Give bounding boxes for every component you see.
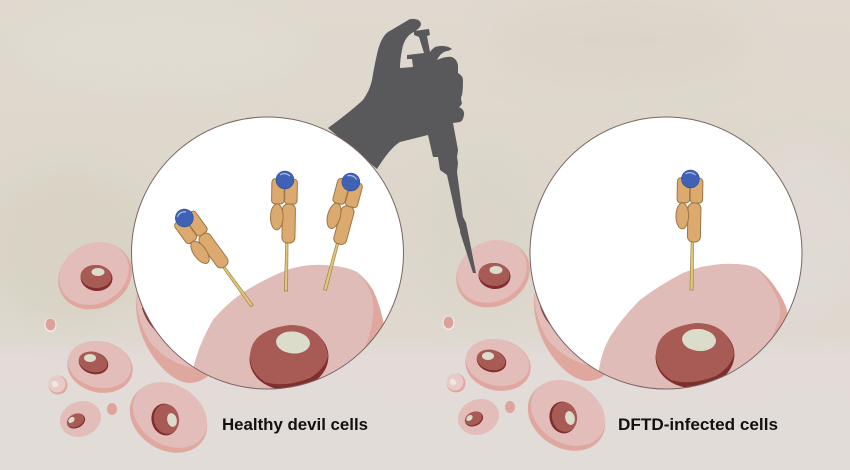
enlarged cell body [598, 264, 788, 371]
magnified circle: healthy devil cells [132, 117, 404, 410]
enlarged nucleus [656, 323, 734, 388]
cell cluster: healthy [44, 230, 230, 467]
antibody [675, 170, 703, 290]
cell cluster: infected [442, 228, 628, 465]
enlarged nucleus [250, 325, 328, 388]
antibody left [168, 203, 260, 316]
label: DFTD-infected cells: DFTD-infected cells [618, 415, 778, 434]
antibody middle [269, 171, 298, 291]
hand holding pipette [328, 19, 476, 273]
enlarged cell body [194, 264, 384, 367]
label: healthy devil cells: Healthy devil cells [222, 415, 368, 434]
antibody right [309, 170, 365, 292]
magnified circle: DFTD-infected cells [530, 117, 802, 410]
pipette tip over cell [460, 217, 476, 273]
